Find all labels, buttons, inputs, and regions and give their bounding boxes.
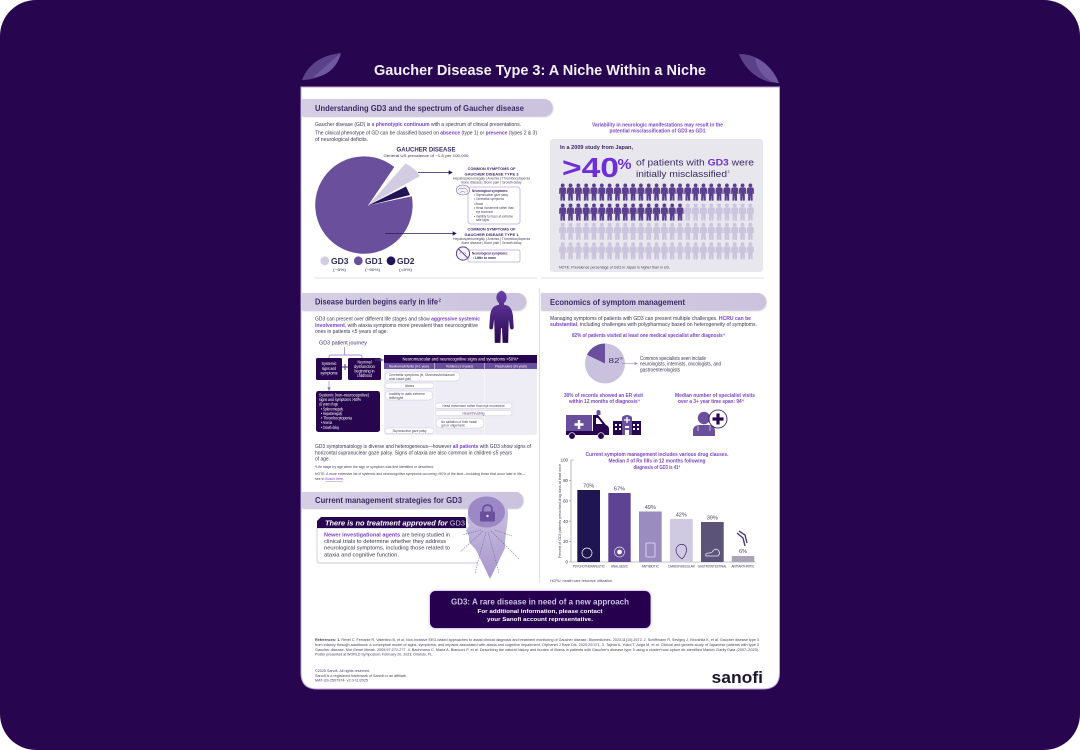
banner: no treatment approved: There is no treatment approved for GD3 [325, 519, 465, 528]
footnotes [315, 465, 525, 481]
heading bar [541, 293, 766, 310]
poster [301, 53, 780, 689]
bar: antiarthritic: ANTIARTHRITIC [732, 564, 755, 568]
panel: current management [302, 492, 523, 579]
legend: GD3 [331, 257, 349, 266]
heading bar: Economics of symptom management [550, 297, 685, 307]
pie chart: 82%: % [620, 356, 624, 360]
icon: brain [456, 185, 470, 195]
pie heading: General US prevalence of ~1.8 per 100,000 [384, 153, 469, 158]
callout: type 1 symptoms [453, 226, 530, 262]
pie heading [384, 146, 469, 158]
callout: type 1 symptoms: • Little to none [473, 256, 496, 260]
head illustration [460, 494, 519, 579]
footnotes: see in Bosch here. [315, 477, 344, 481]
arrow: to type 1 symptoms [385, 232, 456, 235]
callout: type 1 symptoms: Neurological symptoms: [472, 250, 508, 256]
summary text [315, 444, 531, 463]
panel: disease burden [302, 290, 537, 481]
bar: cardiovascular: 42% [676, 512, 687, 518]
arrow: to type 3 symptoms [418, 171, 452, 174]
stat text: of patients with GD3 were [636, 158, 754, 168]
icon: hospital [613, 415, 641, 435]
intro text: GD3 can present over different life stages and show aggressive systemic [315, 317, 480, 323]
pill: ataxia [385, 383, 434, 388]
heading bar: Current management strategies for GD3 [315, 495, 462, 505]
bar chart: drug classes: 100 [561, 458, 569, 462]
copyright: ©2025 Sanofi. All rights reserved. [315, 669, 370, 673]
callout: call to action [430, 591, 650, 628]
intro text [315, 122, 537, 143]
legend: GD1 [365, 257, 383, 266]
box: systemic list: ≤5 years of age [319, 402, 338, 406]
heading bar [302, 99, 552, 116]
panel: understanding GD3 [302, 99, 552, 272]
bar: antibiotic: ANTIBIOTIC [642, 564, 659, 568]
table: neuromuscular signs by age: Newborns/infants (0-1 year) [389, 364, 430, 369]
legend: GD2 [397, 257, 415, 266]
specialist text: neurologists, internists, oncologists, and [640, 362, 721, 368]
copyright: MAT-US-2507974- v2.0-11/2025 [315, 678, 368, 682]
intro text: involvement, with ataxia symptoms more prevalent than neurocognitive [315, 323, 478, 329]
dotted radiating arrows [460, 530, 519, 573]
stat: specialist visits: Median number of specialist visits [675, 393, 755, 399]
bar: analgesic [608, 486, 631, 568]
box: systemic signs [316, 358, 342, 380]
box: neuronal dysfunction [348, 358, 381, 380]
bar: analgesic: 67% [614, 486, 625, 492]
summary text: horizontal supranuclear gaze palsy. Signs of ataxia are also common in children ≤5 years [315, 450, 512, 456]
stat text [560, 145, 754, 183]
stat text: In a 2009 study from Japan, [560, 145, 634, 151]
table: neuromuscular signs by age: Neuromuscular and neurocognitive signs and symptoms >50%* [402, 357, 519, 362]
box: neuronal dysfunction: childhood [357, 373, 372, 378]
legend: (~5%) [333, 267, 347, 272]
specialist text: Common specialists seen include [640, 356, 706, 362]
pill: head movement: Head movement rather than eye movement [442, 404, 504, 408]
chart heading: diagnosis of GD3 is 41⁴ [634, 465, 681, 471]
panel: economics [541, 293, 766, 583]
stat: ER visit [564, 393, 643, 405]
poster body [301, 87, 780, 689]
pill: supranuclear gaze palsy: Supranuclear gaze palsy [392, 429, 427, 433]
chart heading: Median # of Rx fills in 12 months following [608, 459, 706, 465]
callout heading [592, 122, 723, 134]
intro text: Gaucher disease (GD) is a phenotypic continuum with a spectrum of clinical presentations. [315, 122, 521, 128]
chart heading: Current symptom management includes various drug classes. [586, 452, 729, 458]
summary text: GD3 symptomatology is diverse and heterogeneous—however all patients with GD3 show signs of [315, 444, 531, 450]
pill: head movement [435, 403, 512, 408]
callout: type 3 symptoms: • Supranuclear gaze palsy [474, 193, 508, 197]
icon: doctor with plus [693, 410, 727, 436]
callout: type 3 symptoms: • Ataxia [474, 202, 483, 206]
bar chart: drug classes: 60 [563, 498, 569, 503]
references: References: 1. Revel C, Ferrante R, Valentino B, et al. Non-invasive EEG-based approaches to assist clinical diagnosis and treatment monitoring of Gaucher disease. Biomedicines. 2023;11(10):2672. 2. Schiffmann R, Sevigny J, Kinoshita K, et al. Gaucher disease type 3 [315, 638, 759, 642]
stat: ER visit: within 12 months of diagnosis⁴ [568, 399, 640, 405]
box: systemic list: Systemic (non–neurocognitive) [319, 392, 369, 398]
callout: type 3 symptoms: eye movement [476, 210, 493, 214]
stat text: >40 [562, 152, 619, 183]
pill: head thrusting: Head thrusting [462, 411, 484, 415]
bar: cardiovascular [668, 512, 695, 568]
references: Poster presented at WORLD Symposium; February 20, 2023; Orlando, FL. [315, 652, 433, 656]
pill: saltation: gut or oligomeric [441, 424, 465, 428]
intro text: of neurological deficits. [315, 137, 368, 143]
panel: misclassification [550, 122, 763, 272]
copyright: Sanofi is a registered trademark of Sanofi or an affiliate. [315, 674, 407, 678]
bar chart: drug classes: 0 [566, 560, 569, 565]
callout: call to action: GD3: A rare disease in need of a new approach [451, 598, 629, 606]
chart note: HCRU, health care resource utilization. [550, 579, 613, 583]
pill: saltation: No saltation of their head/ [441, 420, 478, 424]
callout: call to action: For additional information, please contact [478, 609, 603, 615]
flow chart: GD3 patient journey [316, 341, 384, 432]
callout: type 1 symptoms: COMMON SYMPTOMS OF [468, 226, 516, 232]
footnotes: NOTE: A more extensive list of systemic and neurocognitive symptoms occurring >50% of the time—including those that occur later in life— [315, 472, 525, 476]
pill: cerebellar: Cerebellar symptoms (ie, Dizziness/Imbalance/ [389, 373, 456, 377]
intro text: ones in patients <5 years of age. [315, 329, 388, 335]
specialist text: gastroenterologists [640, 367, 680, 373]
heading bar [302, 492, 523, 508]
title: Gaucher Disease Type 3: A Niche Within a Niche [374, 62, 706, 79]
bar: gastrointestinal [698, 516, 727, 568]
callout: type 3 symptoms: safe signs [476, 218, 489, 222]
bar: psychotherapeutic: PSYCHOTHERAPEUTIC [573, 564, 605, 568]
bar: antiarthritic: 6% [739, 549, 747, 555]
legend: (<5%) [399, 267, 413, 272]
box: systemic list: • Anemia [321, 420, 332, 425]
callout: type 3 symptoms [453, 166, 530, 224]
bar: antibiotic [639, 505, 662, 568]
arrows between boxes [328, 359, 384, 390]
column divider [315, 278, 764, 583]
heading bar: Disease burden begins early in life [315, 296, 438, 306]
pill: cerebellar: wide-based gait) [389, 377, 411, 381]
box: neuronal dysfunction: beginning in [354, 368, 375, 374]
heading bar: Understanding GD3 and the spectrum of Gaucher disease [315, 103, 524, 113]
pill: inability to walk: left/right [389, 396, 403, 400]
heading bar [302, 293, 526, 310]
box: systemic list: • Thrombocytopenia [321, 416, 352, 421]
table: neuromuscular signs by age [384, 355, 537, 435]
bar: gastrointestinal: GASTROINTESTINAL [698, 564, 727, 568]
bar: psychotherapeutic: 70% [583, 484, 594, 490]
stat: specialist visits [675, 393, 755, 405]
bar: analgesic: ANALGESIC [611, 564, 629, 568]
callout: type 1 symptoms: Hepatosplenomegaly | Anemia | Thrombocytopenia [453, 237, 530, 241]
table: neuromuscular signs by age: Preschoolers (3-5 years) [495, 364, 528, 369]
box: neuronal dysfunction: dysfunction [354, 364, 375, 369]
callout: type 3 symptoms: • Inability to focus at extreme [474, 214, 513, 218]
pill: head thrusting [435, 410, 512, 416]
bar chart: drug classes: 40 [563, 519, 569, 524]
bar: cardiovascular: CARDIOVASCULAR [668, 564, 695, 568]
callout heading: Variability in neurologic manifestations may result in the [592, 122, 723, 128]
summary text: of age. [315, 457, 330, 463]
box: systemic list [316, 391, 380, 432]
body text: clinical trials to determine whether they address [324, 539, 446, 545]
bar chart: drug classes: 20 [563, 539, 569, 544]
chart heading [586, 452, 729, 471]
specialist text [640, 356, 721, 373]
box: systemic list: • Hepatomegaly [321, 411, 342, 416]
bar chart: drug classes: Percent of GD3 patients prescribed drug class at least once [558, 464, 562, 558]
pill: supranuclear gaze palsy [385, 428, 434, 433]
box: systemic list: • Splenomegaly [321, 406, 343, 412]
box: systemic list: signs and symptoms >50% [319, 397, 361, 402]
pill: ataxia: Ataxia [405, 384, 415, 388]
callout heading: potential misclassification of GD3 as GD1 [610, 128, 706, 134]
grey stat card [550, 139, 763, 272]
references: from infancy through adulthood: a conceptual model of signs, symptoms, and impacts associated with ataxia and cognitive impairment. Orphanet J Rare Dis. 2020;20:371. 3. Tajima A, Yokoi T, Ariga M, et al. Clinical and genetic study of Japanese patients with type 3 [315, 643, 759, 647]
references: Gaucher disease. Mol Genet Metab. 2009;97:272-277. 4. Bachmann C, Maria A, Bianconi P, et al. Describing the natural history and burden of illness in patients with Gaucher's disease type 3 using a cluster*now-optum de-identified Market Clarity Data (2007–2023). [315, 648, 759, 652]
box: systemic signs: Systemic [322, 361, 337, 366]
icon: child silhouette [489, 290, 514, 343]
pill: cerebellar [385, 372, 460, 381]
pie heading: GAUCHER DISEASE [396, 146, 456, 154]
callout: type 3 symptoms: • Head movement rather than [474, 206, 514, 210]
intro text: Managing symptoms of patients with GD3 can present multiple challenges. HCRU can be [550, 316, 751, 322]
body text [324, 532, 450, 558]
icon: plus [342, 364, 348, 370]
callout: type 3 symptoms: Hepatosplenomegaly | Anemia | Thrombocytopenia [453, 176, 530, 180]
bar chart: drug classes [558, 458, 756, 568]
icon: crossed-out brain [456, 247, 470, 260]
icon: padlock [480, 505, 495, 522]
text card outline [317, 528, 478, 563]
intro text [315, 317, 480, 335]
pie chart: 82%: 82 [608, 358, 620, 365]
heading bar: 2 [438, 298, 442, 302]
table: neuromuscular signs by age: Toddlers (1-3 years) [446, 364, 474, 369]
callout: type 1 symptoms: GAUCHER DISEASE TYPE 1 [464, 232, 519, 237]
stat text: 3 [728, 170, 730, 174]
callout: type 3 symptoms: Bone disease | Bone pain | Growth delay [462, 180, 522, 184]
arrow: pie to specialists [622, 362, 637, 365]
references [315, 638, 759, 656]
callout: type 3 symptoms: Neurological symptoms: [472, 188, 508, 193]
bar chart: drug classes: 80 [563, 478, 569, 483]
logo: sanofi: sanofi [712, 668, 763, 687]
legend [320, 256, 415, 272]
box: systemic signs: symptoms [320, 371, 338, 376]
bar: psychotherapeutic [573, 484, 605, 568]
box: systemic signs: signs and [322, 366, 336, 371]
pill: saltation [436, 418, 484, 428]
footnotes: *Life stage by age when the sign or symptom was first identified or described. [315, 465, 434, 469]
pill: inability to walk: Inability to walk extreme [389, 392, 425, 396]
bar: antibiotic: 49% [645, 505, 656, 511]
stat text: initially misclassified [636, 169, 727, 179]
flow chart: GD3 patient journey: GD3 patient journey [319, 341, 367, 347]
intro text [550, 316, 757, 328]
stat: specialist visits: over a 3+ year time span: 94⁴ [678, 399, 744, 405]
box: systemic list: • Growth delay [321, 425, 339, 430]
body text: neurological symptoms, including those related to [324, 546, 450, 552]
pie chart: 82% [585, 344, 625, 384]
stat text: % [618, 156, 632, 173]
note: NOTE: Prevalence percentage of GD3 in Japan is higher than in US. [559, 266, 670, 270]
pie chart: GD types [315, 156, 420, 254]
intro text: substantial, including challenges with polypharmacy based on heterogeneity of symptoms. [550, 322, 757, 328]
body text: Newer investigational agents are being studied in [324, 532, 450, 538]
icon: ambulance [566, 410, 609, 439]
pictogram: 100 people, 41 highlighted [559, 184, 754, 259]
intro text: The clinical phenotype of GD can be classified based on absence (type 1) or presence (types 2 & 3) [315, 130, 537, 136]
callout: type 3 symptoms: GAUCHER DISEASE TYPE 3 [464, 171, 519, 176]
callout: type 3 symptoms: • Cerebellar symptoms [474, 197, 504, 201]
callout: call to action: your Sanofi account representative. [487, 617, 593, 623]
copyright [315, 669, 407, 682]
icon: right leaf [739, 54, 779, 83]
pill: inability to walk [385, 391, 433, 400]
stat heading: 82%: 82% of patients visited at least one medical specialist after diagnosis⁴ [572, 333, 725, 339]
icon: left leaf [302, 53, 341, 80]
callout: type 1 symptoms: Bone disease | Bone pain | Growth delay [462, 241, 522, 245]
legend: (~90%) [365, 267, 381, 272]
callout: type 3 symptoms: COMMON SYMPTOMS OF [468, 166, 516, 171]
box: neuronal dysfunction: Neuronal [358, 360, 372, 364]
bar: antiarthritic [732, 531, 755, 568]
bar: gastrointestinal: 39% [707, 516, 718, 522]
stat: ER visit: 30% of records showed an ER visit [564, 393, 643, 399]
body text: ataxia and cognitive function. [324, 552, 399, 558]
